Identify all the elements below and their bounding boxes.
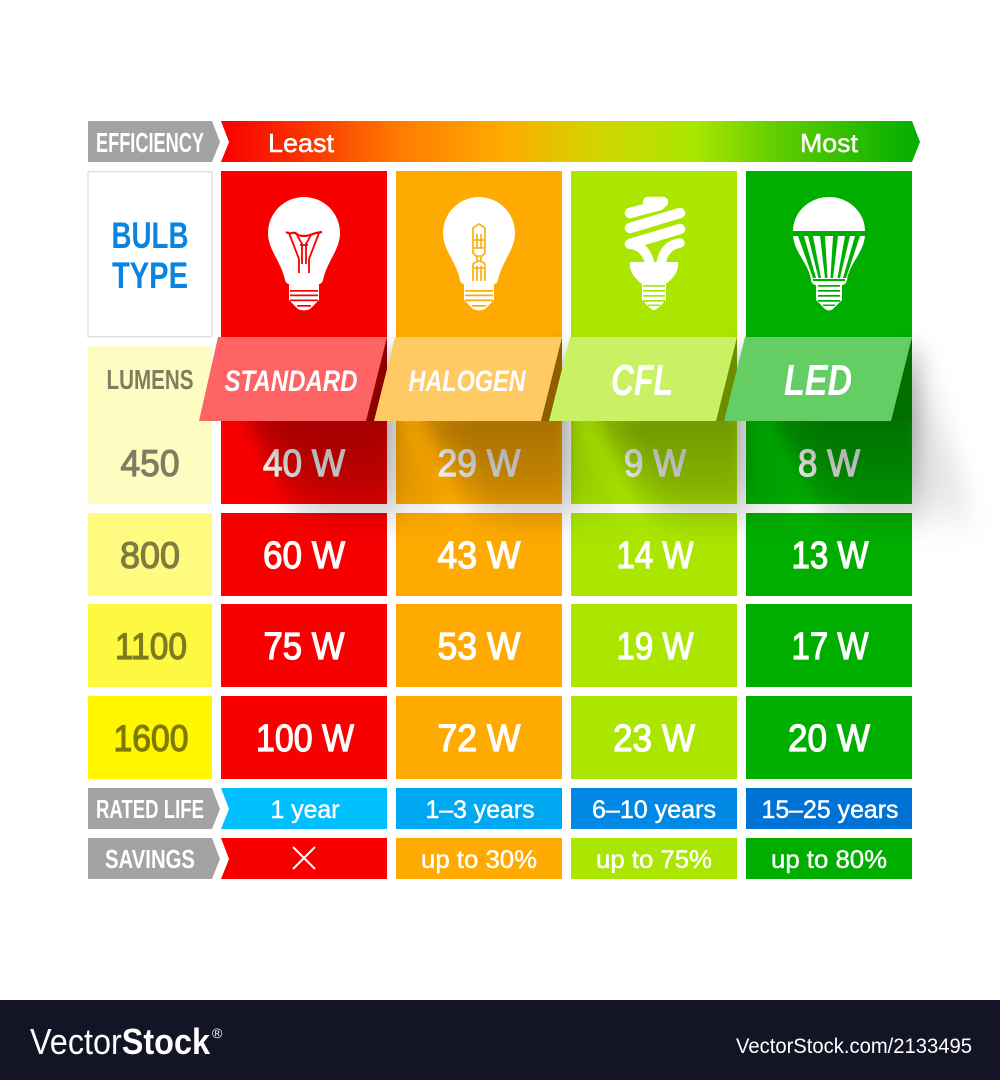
bulb type box: [88, 172, 212, 337]
footer logo: VectorStock: [30, 1021, 211, 1062]
column: standard: 75 W: [264, 626, 345, 668]
column: cfl: 9 W: [624, 443, 686, 485]
ribbon: standard: STANDARD: [224, 365, 358, 398]
rated life: halogen: [396, 788, 562, 829]
savings: halogen: [396, 838, 562, 879]
savings: standard with cross: [221, 838, 387, 879]
ribbon folds: [366, 337, 912, 421]
lumens 450 cell with heading: [88, 346, 212, 504]
footer registered mark: ®: [212, 1025, 223, 1041]
savings label: [88, 838, 220, 879]
savings: cfl: [571, 838, 737, 879]
savings: led: up to 80%: [771, 846, 887, 874]
lumens 450 cell with heading: LUMENS: [106, 364, 194, 395]
column: standard: 40 W: [263, 443, 345, 485]
column: halogen: [396, 171, 562, 779]
rated life row: [88, 788, 912, 829]
efficiency gradient arrow: Most: [800, 128, 859, 158]
savings: cfl: up to 75%: [596, 846, 712, 874]
ribbon: led: [724, 337, 912, 421]
lumens 1600: [88, 696, 212, 779]
footer image id: VectorStock.com/2133495: [736, 1035, 972, 1058]
lumens 800: 800: [120, 535, 180, 576]
bulb type box: BULB: [112, 215, 188, 256]
column: cfl: 19 W: [616, 626, 694, 668]
savings: halogen: up to 30%: [421, 846, 537, 874]
column: cfl: 23 W: [613, 718, 695, 760]
ribbon: cfl: CFL: [611, 356, 673, 405]
column: cfl: 14 W: [616, 535, 694, 577]
ribbon: standard: [199, 337, 387, 421]
column: halogen: 72 W: [438, 718, 521, 760]
footer bar: [0, 1000, 1000, 1080]
column: cfl: [571, 171, 737, 779]
column: led: [746, 171, 912, 779]
efficiency label: EFFICIENCY: [96, 127, 204, 158]
main ribbon cast shadows: [243, 340, 925, 540]
ribbon: halogen: [374, 337, 562, 421]
rated life: led: 15–25 years: [762, 796, 898, 824]
ribbon: cfl: [549, 337, 737, 421]
column: standard: 100 W: [256, 718, 354, 760]
column: led: 17 W: [792, 626, 869, 668]
rated life: halogen: 1–3 years: [426, 796, 534, 824]
icon: standard bulb: [268, 197, 340, 310]
lumens 450 cell with heading: 450: [120, 443, 180, 484]
icon: cfl spiral bulb: [630, 202, 680, 310]
column: halogen: 43 W: [438, 535, 521, 577]
efficiency gradient arrow: [221, 121, 920, 162]
column: led: 8 W: [798, 443, 860, 485]
savings row: [88, 838, 912, 879]
column: halogen: 53 W: [438, 626, 521, 668]
savings label: SAVINGS: [105, 844, 195, 874]
savings: led: [746, 838, 912, 879]
rated life: cfl: [571, 788, 737, 829]
lumens column: [88, 346, 212, 779]
lumens 1600: 1600: [114, 718, 188, 759]
column: halogen: 29 W: [438, 443, 521, 485]
column: standard: 60 W: [263, 535, 345, 577]
column: led: 13 W: [792, 535, 869, 577]
lumens 800: [88, 513, 212, 596]
icon: led bulb: [793, 197, 865, 310]
efficiency label: [88, 121, 220, 162]
ribbon: halogen: HALOGEN: [408, 365, 527, 398]
soft outer ribbon shadows: [270, 340, 980, 540]
rated life: standard: [221, 788, 387, 829]
lumens 1100: 1100: [115, 626, 187, 667]
column: led: 20 W: [788, 718, 870, 760]
efficiency gradient arrow: Least: [268, 128, 335, 158]
ribbon: led: LED: [784, 356, 852, 405]
lumens 1100: [88, 604, 212, 687]
rated life label: RATED LIFE: [96, 794, 204, 824]
rated life: cfl: 6–10 years: [592, 796, 716, 824]
rated life label: [88, 788, 220, 829]
bulb type box: TYPE: [112, 255, 188, 296]
rated life: standard: 1 year: [270, 796, 340, 824]
icon: halogen bulb: [443, 197, 515, 310]
rated life: led: [746, 788, 912, 829]
column: standard: [221, 171, 387, 779]
efficiency row: [88, 121, 920, 162]
